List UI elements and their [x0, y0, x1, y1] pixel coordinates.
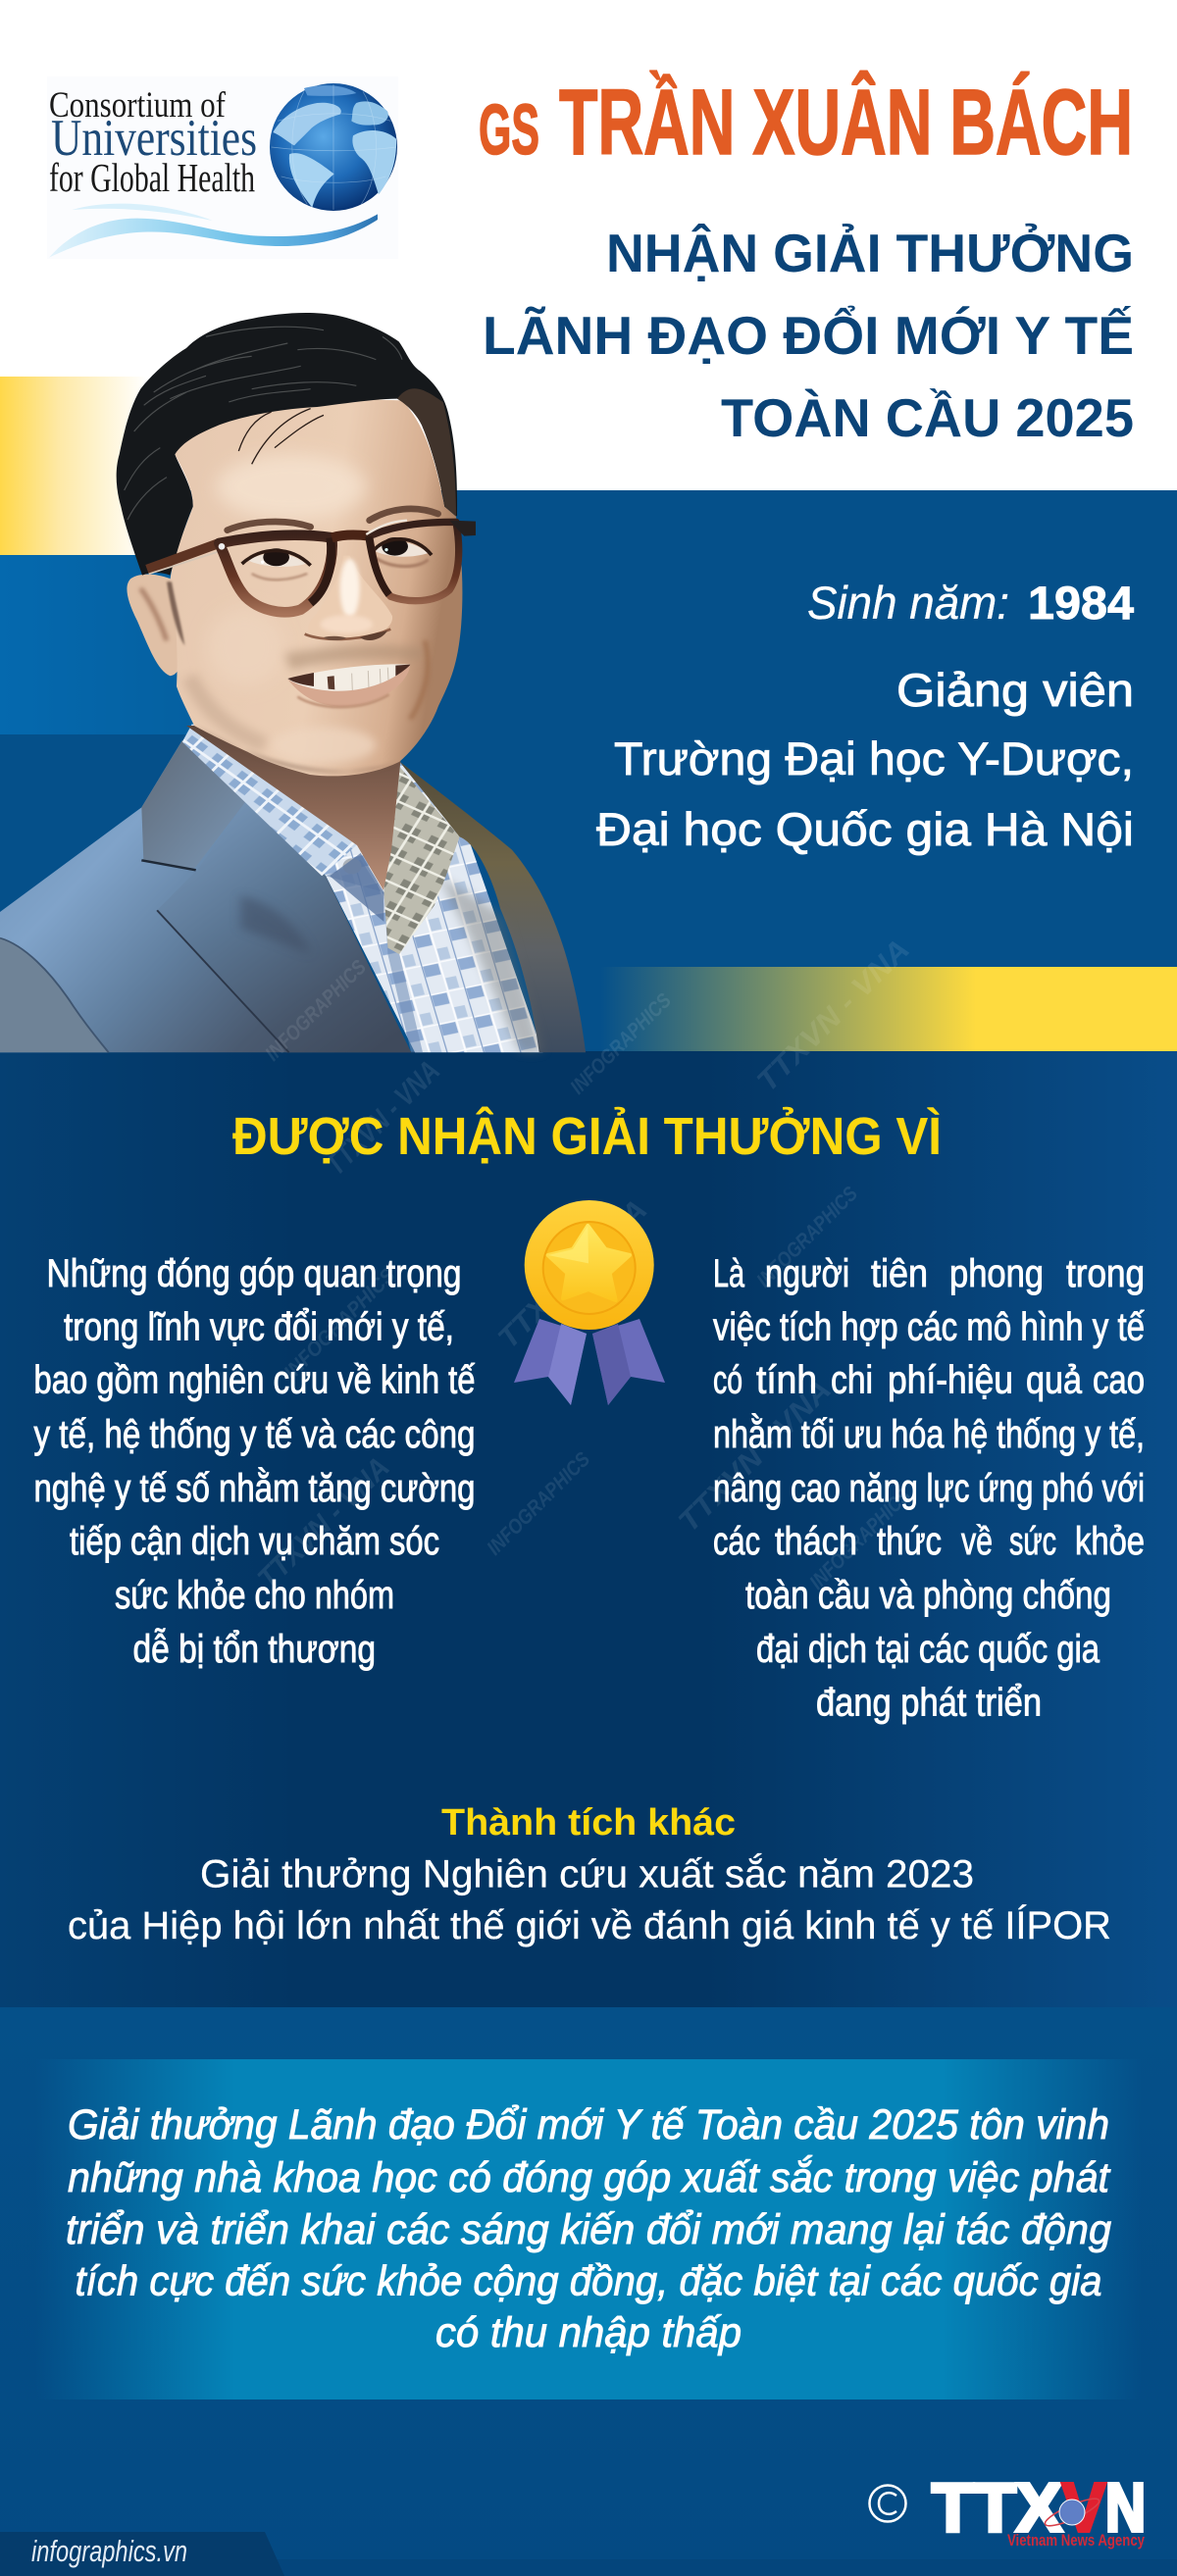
text block: left reason: Những đóng góp quan trọng: [47, 1252, 461, 1295]
portrait: neck: [186, 726, 401, 890]
position and university: Trường Đại học Y-Dược,: [614, 732, 1134, 784]
watermarks: INFOGRAPHICS: [805, 1485, 915, 1594]
logo wordmark: Universities: [51, 110, 257, 167]
other achievements: [68, 1802, 1111, 1947]
text block: right reason: phong: [949, 1252, 1044, 1295]
TTXVN wordmark: [932, 2469, 1146, 2546]
watermarks: TTXVN - VNA: [751, 934, 916, 1098]
text block: award description: triển và triển khai các sáng kiến đổi mới mang lại tác động: [66, 2206, 1111, 2253]
watermarks: TTXVN - VNA: [320, 1055, 446, 1182]
mouth: [287, 640, 428, 719]
portrait: suit and shirt: [0, 724, 586, 1052]
left light blue block: [0, 555, 216, 734]
title: award name: NHẬN GIẢI THƯỞNG: [606, 223, 1134, 283]
text block: right reason: quả: [1026, 1359, 1083, 1402]
position and university: Giảng viên: [896, 664, 1134, 716]
stubble: [284, 645, 426, 670]
text block: left reason: nghệ y tế số nhằm tăng cường: [33, 1466, 475, 1510]
panel: lower blue section: [0, 2007, 1177, 2576]
text block: right reason: khỏe: [1075, 1520, 1145, 1563]
text block: right reason: tính: [756, 1359, 817, 1402]
title: [479, 70, 1134, 448]
text block: right reason: về: [961, 1520, 993, 1563]
text block: left reason: trong lĩnh vực đổi mới y tế,: [64, 1306, 454, 1349]
title: award name: TOÀN CẦU 2025: [721, 387, 1134, 448]
text block: right reason: các: [713, 1520, 760, 1563]
title: award name: LÃNH ĐẠO ĐỔI MỚI Y TẾ: [483, 305, 1134, 366]
text block: left reason: tiếp cận dịch vụ chăm sóc: [70, 1520, 439, 1563]
medal star: [548, 1226, 630, 1300]
text block: right reason: có: [713, 1359, 742, 1402]
achievements heading: Thành tích khác: [441, 1802, 736, 1844]
TTXVN wordmark: TTX: [932, 2469, 1062, 2546]
logo wordmark: Consortium of: [49, 85, 227, 126]
text block: award description: Giải thưởng Lãnh đạo Đổi mới Y tế Toàn cầu 2025 tôn vinh: [68, 2101, 1109, 2148]
eyes: [242, 537, 432, 580]
logo: Consortium of Universities for Global Health: [47, 76, 398, 259]
text block: right reason: trong: [1066, 1252, 1145, 1295]
text block: right reason: [713, 1252, 1145, 1724]
jaw shadow: [194, 726, 399, 772]
logo background: [47, 76, 398, 259]
logo wordmark: [49, 85, 257, 200]
text block: right reason: đại dịch tại các quốc gia: [756, 1628, 1100, 1671]
watermarks: [252, 934, 916, 1595]
background: white header: [0, 0, 1177, 490]
footer source: infographics.vn: [31, 2534, 187, 2568]
eyebrows: [228, 509, 438, 530]
face shape: [170, 399, 462, 776]
panel: dark award section: [0, 1051, 1177, 2007]
cheek highlight: [206, 608, 284, 686]
copyright symbol: [869, 2485, 906, 2522]
medal coin: [525, 1200, 654, 1330]
text block: left reason: dễ bị tổn thương: [133, 1627, 376, 1671]
birth year: Sinh năm:: [807, 577, 1009, 629]
text block: right reason: chi: [831, 1359, 873, 1402]
watermarks: INFOGRAPHICS: [483, 1448, 594, 1560]
watermarks: TTXVN - VNA: [252, 1451, 396, 1595]
birth year: 1984: [1028, 577, 1134, 629]
left yellow accent block: [0, 377, 147, 555]
sideburn: [167, 581, 184, 645]
profile text: [596, 577, 1134, 855]
birth year: [807, 577, 1134, 629]
footer tab: [0, 2532, 284, 2576]
forehead highlight: [216, 454, 366, 520]
watermarks: INFOGRAPHICS: [280, 1264, 400, 1385]
position and university: Đại học Quốc gia Hà Nội: [596, 803, 1134, 855]
nose: [305, 556, 392, 640]
glasses: [147, 521, 476, 612]
background: blue profile band: [0, 490, 1177, 1052]
text block: right reason: thức: [877, 1520, 942, 1563]
icon: medal with ribbons: [514, 1200, 665, 1405]
watermarks: INFOGRAPHICS: [752, 1183, 862, 1292]
watermarks: INFOGRAPHICS: [566, 989, 676, 1099]
logo globe and swoosh: [49, 83, 397, 258]
ear: [127, 575, 181, 676]
text block: right reason: toàn cầu và phòng chống: [745, 1574, 1111, 1617]
footer strip: [0, 2559, 1177, 2576]
portrait photo illustration: [0, 313, 586, 1052]
panel: teal highlight box: [0, 2059, 1177, 2399]
hair: [117, 313, 457, 576]
watermarks: INFOGRAPHICS: [261, 956, 371, 1066]
heading: award reason: ĐƯỢC NHẬN GIẢI THƯỞNG VÌ: [232, 1106, 942, 1166]
text block: left reason: sức khỏe cho nhóm: [115, 1574, 394, 1617]
position and university: [596, 664, 1134, 855]
text block: right reason: cao: [1093, 1359, 1145, 1402]
text block: left reason: [33, 1252, 475, 1671]
text block: right reason: phí-hiệu: [888, 1359, 1013, 1402]
watermarks: TTXVN - VNA: [673, 1374, 838, 1539]
text block: right reason: người: [765, 1252, 849, 1295]
achievements text: của Hiệp hội lớn nhất thế giới về đánh giá kinh tế y tế IÍPOR: [68, 1903, 1111, 1947]
title: name: GS: [479, 91, 539, 170]
text block: right reason: thách: [775, 1520, 857, 1563]
text block: right reason: Là: [713, 1252, 745, 1295]
logo wordmark: for Global Health: [49, 155, 255, 200]
portrait: head: [117, 313, 476, 776]
right yellow gradient band: [600, 967, 1177, 1052]
text block: award description: những nhà khoa học có đóng góp xuất sắc trong việc phát: [68, 2154, 1111, 2201]
chin highlight: [272, 728, 376, 763]
logo: TTXVN: [869, 2469, 1146, 2550]
achievements text: [68, 1851, 1111, 1947]
text block: left reason: y tế, hệ thống y tế và các công: [33, 1413, 475, 1456]
text block: award description: có thu nhập thấp: [435, 2309, 742, 2356]
text block: right reason: tiên: [871, 1252, 928, 1295]
TTXVN wordmark: V: [1062, 2469, 1105, 2546]
text block: right reason: đang phát triển: [816, 1681, 1042, 1724]
medal ribbons: [514, 1319, 665, 1405]
text block: award description: tích cực đến sức khỏe cộng đồng, đặc biệt tại các quốc gia: [75, 2258, 1102, 2305]
text block: award description: [66, 2101, 1111, 2356]
text block: right reason: sức: [1009, 1520, 1056, 1563]
text block: left reason: bao gồm nghiên cứu về kinh tế: [33, 1359, 475, 1402]
achievements text: Giải thưởng Nghiên cứu xuất sắc năm 2023: [200, 1851, 974, 1896]
TTXVN globe: [1043, 2494, 1101, 2531]
title: award name: [483, 223, 1134, 448]
TTXVN wordmark: N: [1105, 2469, 1146, 2546]
watermarks: TTXVN - VNA: [492, 1193, 653, 1355]
